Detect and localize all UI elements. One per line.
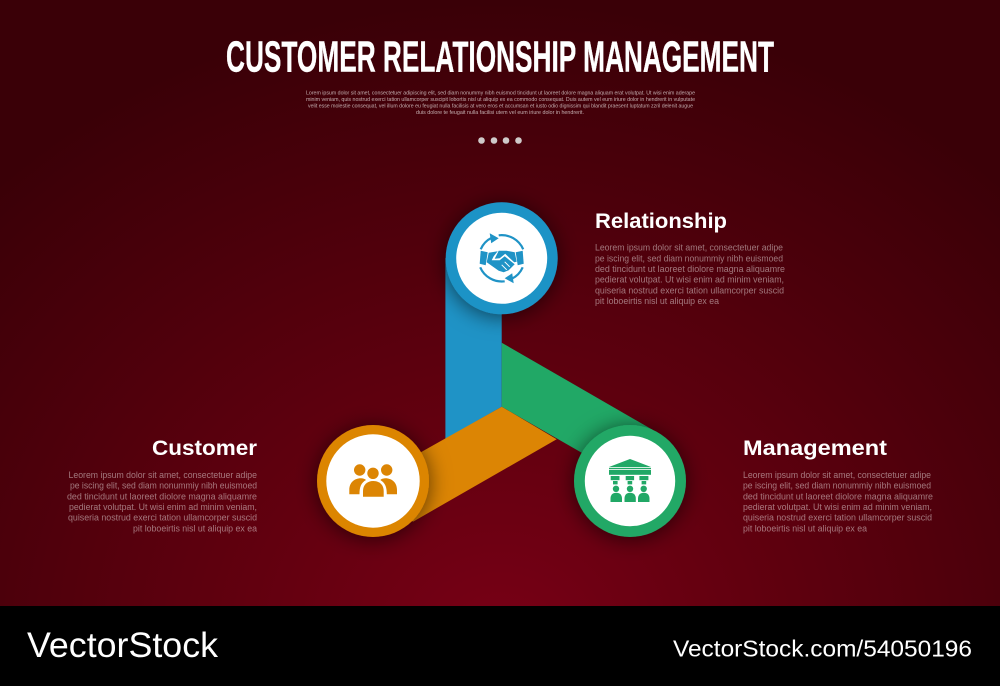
intro text block: Lorem ipsum dolor sit amet, consectetuer adipiscing elit, sed diam nonummy nibh euismod tincidunt ut laoreet dolore magna aliquam erat volutpat. Ut wisi enim aderape: [306, 90, 695, 96]
node: customer circle with people icon: [317, 425, 429, 537]
body: management: pedierat volutpat. Ut wisi enim ad minim veniam,: [743, 502, 932, 513]
body: customer: pe iscing elit, sed diam nonummiy nibh euismoed: [70, 481, 257, 492]
text block: customer: [67, 437, 258, 534]
intro text block: minim veniam, quis nostrud exerci tation ullamcorper suscipit lobortis nisl ut aliquip ex ea commodo consequat. Duis autem vel eum iriure dolor in hendrerit in vulputate: [306, 97, 695, 103]
pagination dots: [478, 137, 522, 144]
body: relationship: Leorem ipsum dolor sit amet, consectetuer adipe: [595, 243, 783, 254]
intro text block: velit esse molestie consequat, vel illum dolore eu feugiat nulla facilisis at vero eros et accumsan et iusto odio dignissim qui blandit praesent luptatum zzril delenit augue: [308, 104, 693, 110]
body: customer: pedierat volutpat. Ut wisi enim ad minim veniam,: [69, 502, 257, 513]
intro text block: [306, 90, 695, 116]
band: green management: [502, 343, 653, 480]
node: management circle with institution icon: [574, 425, 686, 537]
icon: handshake in cycle arrows: [480, 233, 524, 283]
text block: management: [743, 437, 933, 534]
heading: relationship: Relationship: [595, 210, 727, 233]
body: management: pit loboeirtis nisl ut aliquip ex ea: [743, 523, 868, 534]
footer bar: [0, 606, 1000, 686]
triangular ribbon diagram: [317, 202, 686, 537]
body: customer: [67, 470, 258, 534]
footer image id: VectorStock.com/54050196: [673, 636, 972, 662]
icon: group of people: [349, 464, 397, 497]
icon: institution building with people: [609, 459, 651, 502]
text block: relationship: [595, 210, 785, 307]
body: relationship: pedierat volutpat. Ut wisi enim ad minim veniam,: [595, 275, 784, 286]
body: management: [743, 470, 933, 534]
footer logo: VectorStock: [27, 626, 219, 665]
body: customer: pit loboeirtis nisl ut aliquip ex ea: [133, 523, 258, 534]
body: management: pe iscing elit, sed diam nonummiy nibh euismoed: [743, 481, 931, 492]
body: relationship: pe iscing elit, sed diam nonummiy nibh euismoed: [595, 253, 783, 264]
body: relationship: [595, 243, 785, 307]
body: customer: ded tincidunt ut laoreet diolore magna aliquamre: [67, 491, 257, 502]
body: management: ded tincidunt ut laoreet diolore magna aliquamre: [743, 491, 933, 502]
body: management: quiseria nostrud exerci tation ullamcorper suscid: [743, 513, 932, 524]
band: orange customer: [373, 407, 557, 522]
heading: management: Management: [743, 437, 887, 460]
body: relationship: ded tincidunt ut laoreet diolore magna aliquamre: [595, 264, 785, 275]
body: customer: quiseria nostrud exerci tation ullamcorper suscid: [68, 513, 257, 524]
body: relationship: pit loboeirtis nisl ut aliquip ex ea: [595, 296, 720, 307]
intro text block: duis dolore te feugait nulla facilisi utem vel eum iriure dolor in hendrerit.: [416, 110, 584, 116]
body: customer: Leorem ipsum dolor sit amet, consectetuer adipe: [68, 470, 257, 481]
band: blue relationship: [445, 258, 502, 439]
body: relationship: quiseria nostrud exerci tation ullamcorper suscid: [595, 285, 784, 296]
heading: customer: Customer: [152, 437, 257, 460]
body: management: Leorem ipsum dolor sit amet, consectetuer adipe: [743, 470, 931, 481]
node: relationship circle with handshake icon: [446, 202, 558, 314]
